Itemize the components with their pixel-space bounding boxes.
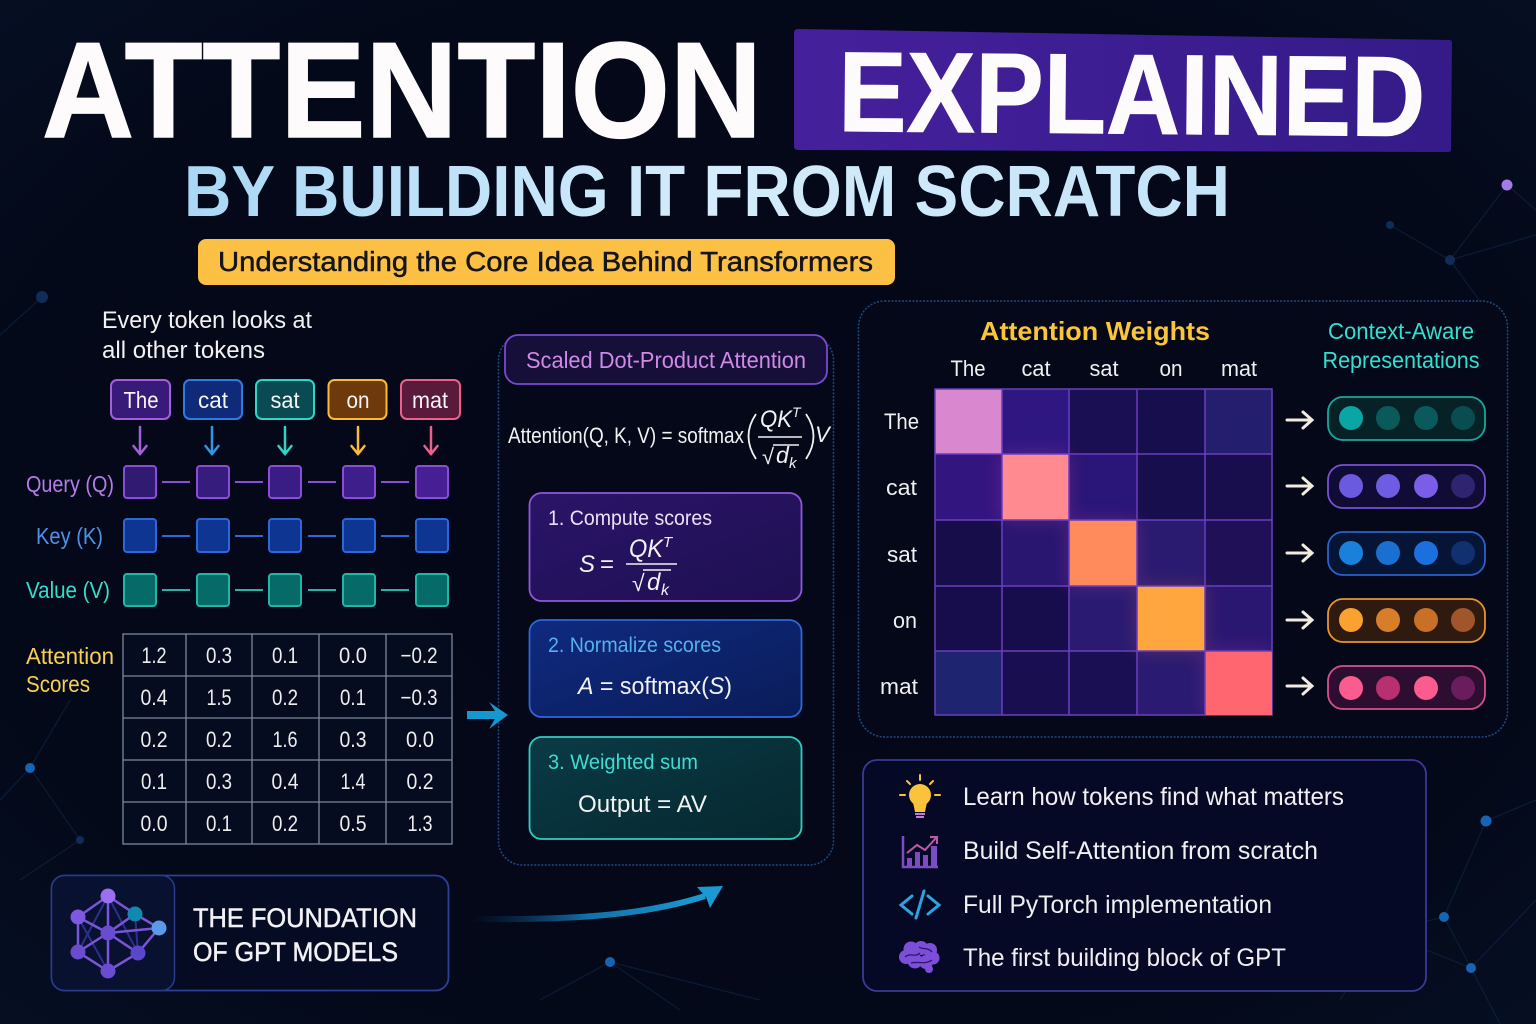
intro text: Every token looks at — [102, 307, 312, 334]
foundation text — [193, 903, 417, 967]
main formula: d — [776, 442, 790, 468]
panel: learning list — [863, 760, 1426, 991]
value row: Value (V) — [26, 577, 110, 603]
step 1: compute scores: 1. Compute scores — [548, 507, 712, 530]
attention scores table: 0.2 — [140, 727, 168, 752]
main formula: V — [815, 422, 832, 447]
attention scores table: 0.3 — [206, 643, 232, 668]
column labels: The — [950, 356, 986, 381]
token row: The — [124, 387, 158, 413]
row labels — [880, 409, 919, 699]
attention scores table: 1.4 — [340, 769, 366, 794]
step 1: compute scores: = — [600, 551, 614, 578]
attention scores table: −0.3 — [400, 685, 438, 710]
attention scores table: 0.5 — [340, 811, 366, 836]
step 1: compute scores: S — [579, 551, 595, 578]
attention scores table — [123, 634, 452, 844]
query row: Query (Q) — [26, 471, 114, 497]
foundation text: THE FOUNDATION — [193, 903, 417, 933]
token row: mat — [412, 387, 449, 413]
down arrows — [134, 427, 438, 454]
tagline banner: Understanding the Core Idea Behind Transformers — [218, 246, 873, 277]
representation: on — [1328, 599, 1485, 642]
attention scores table: 0.0 — [406, 727, 434, 752]
main formula: QK — [760, 406, 793, 433]
attention scores table: 0.1 — [340, 685, 366, 710]
heading: context-aware representations: Context-Aware — [1328, 318, 1474, 344]
panel: token query key value flow — [26, 307, 460, 606]
attention scores table: 1.6 — [272, 727, 298, 752]
heading: attention weights: Attention Weights — [980, 316, 1210, 346]
step 1: compute scores — [530, 493, 802, 601]
heatmap — [935, 389, 1272, 715]
attention scores table: 0.3 — [206, 769, 232, 794]
attention scores table: −0.2 — [400, 643, 438, 668]
main formula: Attention(Q, K, V) = softmax — [508, 423, 744, 448]
tagline banner — [198, 239, 895, 285]
step 1: compute scores: √ — [632, 570, 645, 596]
icon: brain — [899, 941, 940, 973]
attention scores table: 0.3 — [340, 727, 366, 752]
attention scores label — [26, 643, 114, 697]
panel: foundation of GPT models — [52, 876, 448, 990]
icon: neural network — [52, 876, 174, 990]
column labels: on — [1160, 356, 1182, 381]
representation: mat — [1328, 666, 1485, 709]
attention scores table: 0.4 — [140, 685, 168, 710]
list text: Build Self-Attention from scratch — [963, 837, 1318, 865]
attention scores table: 0.1 — [272, 643, 298, 668]
attention scores table: 0.0 — [339, 643, 367, 668]
list text: Learn how tokens find what matters — [963, 783, 1344, 811]
panel: scaled dot-product attention — [498, 335, 834, 865]
list text: Full PyTorch implementation — [963, 891, 1272, 919]
attention scores table: 0.1 — [141, 769, 167, 794]
attention scores table: 0.2 — [206, 727, 232, 752]
column labels: sat — [1090, 356, 1118, 381]
step 3: weighted sum: Output = AV — [578, 791, 707, 818]
representation: sat — [1328, 532, 1485, 575]
token row: sat — [270, 387, 300, 413]
attention scores table: 0.2 — [272, 685, 298, 710]
token row — [111, 380, 460, 419]
attention scores table: 0.2 — [406, 769, 434, 794]
main formula — [508, 404, 832, 472]
title badge: EXPLAINED: EXPLAINED — [838, 29, 1426, 161]
arrow: curved swoosh — [470, 886, 723, 919]
attention scores label: Attention — [26, 643, 114, 669]
representation: cat — [1328, 465, 1485, 508]
step 1: compute scores: k — [661, 582, 670, 599]
row labels: on — [893, 608, 917, 633]
attention scores table: 0.0 — [140, 811, 168, 836]
row labels: sat — [887, 542, 917, 567]
icon: chart — [903, 836, 938, 867]
step 3: weighted sum — [530, 737, 802, 839]
representation: The — [1328, 397, 1485, 440]
attention scores table: 1.3 — [408, 811, 432, 836]
column labels: mat — [1221, 356, 1257, 381]
row labels: The — [884, 409, 919, 434]
step 1: compute scores: QK — [629, 535, 664, 563]
panel heading: Scaled Dot-Product Attention — [526, 347, 806, 373]
value row — [26, 574, 448, 606]
attention scores label: Scores — [26, 671, 90, 697]
token row: cat — [198, 387, 229, 413]
attention scores table: 1.2 — [142, 643, 166, 668]
arrow: table to formula panel — [467, 702, 508, 729]
token row: on — [346, 387, 370, 413]
icon: light bulb — [900, 775, 940, 817]
column labels — [950, 356, 1257, 381]
intro text: all other tokens — [102, 337, 265, 364]
main formula: k — [789, 455, 798, 472]
list text — [963, 783, 1344, 972]
foundation text: OF GPT MODELS — [193, 937, 398, 967]
attention scores table: 1.5 — [206, 685, 232, 710]
subtitle: BY BUILDING IT FROM SCRATCH — [184, 152, 1230, 232]
attention scores table: 0.4 — [272, 769, 298, 794]
query row — [26, 466, 448, 498]
step 2: normalize scores: 2. Normalize scores — [548, 634, 721, 657]
icon: code brackets — [901, 891, 939, 918]
row labels: cat — [886, 475, 917, 500]
title: ATTENTION: ATTENTION — [42, 14, 762, 166]
main formula: T — [792, 404, 802, 420]
arrows to representations — [1287, 412, 1312, 694]
step 1: compute scores: T — [663, 534, 674, 551]
step 1: compute scores: d — [647, 569, 661, 596]
list text: The first building block of GPT — [963, 944, 1286, 972]
attention scores table: 0.1 — [206, 811, 232, 836]
heading: context-aware representations — [1322, 318, 1480, 373]
row labels: mat — [880, 674, 918, 699]
step 3: weighted sum: 3. Weighted sum — [548, 751, 698, 774]
main formula: √ — [762, 444, 775, 469]
key row — [36, 519, 448, 552]
attention scores table: 0.2 — [272, 811, 298, 836]
intro text — [102, 307, 312, 364]
panel heading — [505, 335, 827, 384]
heading: context-aware representations: Representations — [1322, 347, 1480, 373]
column labels: cat — [1022, 356, 1050, 381]
step 2: normalize scores — [530, 620, 802, 717]
panel: attention weights — [858, 301, 1508, 737]
step 2: normalize scores: A = softmax(S) — [576, 673, 732, 700]
key row: Key (K) — [36, 523, 103, 549]
